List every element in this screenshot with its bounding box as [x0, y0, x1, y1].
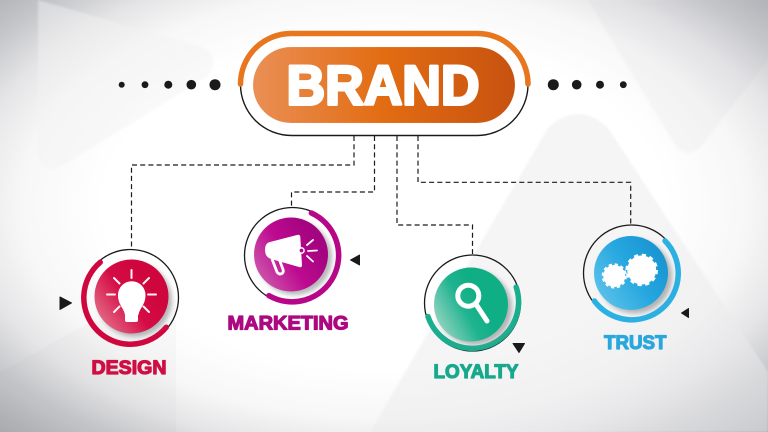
disc	[434, 268, 508, 342]
orange pill	[253, 47, 515, 123]
brand badge	[240, 34, 528, 136]
ring	[244, 208, 340, 304]
right dots	[548, 79, 627, 90]
node: loyalty	[424, 255, 520, 351]
ring	[424, 255, 520, 351]
pointer: loyalty	[513, 344, 524, 352]
disc shadow	[598, 240, 672, 314]
disc shadow	[258, 221, 332, 295]
disc shadow	[98, 263, 172, 337]
coloured arc	[428, 287, 519, 348]
ring	[82, 250, 178, 346]
disc	[254, 218, 328, 292]
label: marketing: MARKETING	[228, 312, 348, 334]
title: BRAND	[286, 54, 480, 116]
disc shadow	[438, 271, 512, 345]
outer ring lower	[240, 85, 528, 136]
icon: gears	[603, 255, 657, 288]
pointer: design	[60, 297, 72, 310]
connector lines	[132, 136, 631, 254]
coloured arc	[84, 262, 166, 344]
disc	[594, 236, 668, 310]
outer ring upper	[240, 34, 528, 84]
node: trust	[584, 225, 680, 321]
pointer: marketing	[350, 255, 360, 265]
pointer: trust	[682, 308, 688, 318]
icon: light bulb	[107, 270, 156, 322]
label: trust: TRUST	[604, 332, 667, 354]
left dots	[119, 79, 220, 90]
node: design	[82, 250, 178, 346]
node: marketing	[244, 208, 340, 304]
icon: megaphone	[265, 235, 317, 274]
label: loyalty: LOYALTY	[434, 361, 518, 383]
coloured arc	[594, 241, 678, 320]
icon: magnifier	[458, 285, 487, 321]
ring	[584, 225, 680, 321]
disc	[94, 260, 168, 334]
label: design: DESIGN	[92, 357, 166, 379]
coloured arc	[269, 213, 339, 302]
